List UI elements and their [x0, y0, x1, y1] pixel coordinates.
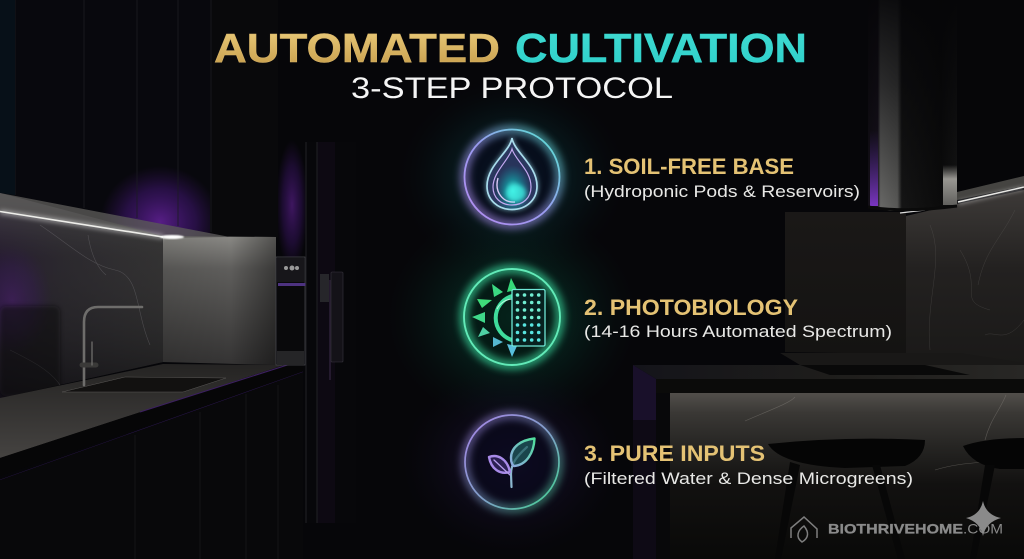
left backsplash marble [0, 193, 163, 398]
island [633, 353, 1024, 559]
step 2 heading: 2. PHOTOBIOLOGY [584, 295, 798, 320]
brand domain suffix: .COM [963, 520, 1003, 536]
icon: house with leaf [791, 517, 817, 542]
connector lines [509, 224, 515, 415]
title word: Cultivation: CULTIVATION [515, 25, 807, 71]
watermark logo [791, 501, 1003, 542]
icon: sparkle star [966, 501, 1001, 536]
LED panel [512, 290, 545, 346]
step 1 heading: 1. SOIL-FREE BASE [584, 154, 794, 179]
icon 3: seedling in ring [465, 415, 559, 509]
left counter top [0, 359, 303, 480]
right backsplash marble [906, 190, 1024, 365]
right upper cabinet [957, 0, 1024, 192]
step 1 description: (Hydroponic Pods & Reservoirs) [584, 183, 860, 201]
step 3 heading: 3. PURE INPUTS [584, 441, 765, 466]
title word: Automated: AUTOMATED [214, 25, 500, 71]
subtitle: 3-STEP PROTOCOL [351, 72, 673, 105]
oven [276, 257, 311, 365]
sun half [472, 278, 517, 357]
brand name bold: BIOTHRIVEHOME [828, 520, 963, 536]
step 2 text [584, 295, 892, 341]
range hood [868, 0, 957, 212]
sink [62, 377, 226, 392]
icon 1: water drop in ring [464, 130, 560, 224]
left upper cabinets [0, 0, 308, 278]
icon 2: sun and LED panel in ring [464, 269, 560, 365]
step 1 text [584, 154, 860, 201]
step 2 description: (14-16 Hours Automated Spectrum) [584, 323, 892, 341]
faucet [82, 307, 142, 385]
under cabinet light strip [0, 193, 230, 239]
step 3 text [584, 441, 913, 488]
right wall panel [785, 212, 906, 354]
steel wall panel [163, 236, 276, 365]
title [214, 25, 807, 71]
right under cabinet light [900, 176, 1024, 213]
bar stools [768, 438, 1024, 559]
step 3 description: (Filtered Water & Dense Microgreens) [584, 470, 913, 488]
central glow [397, 77, 627, 277]
left base cabinets [0, 372, 303, 559]
fridge [306, 142, 356, 523]
